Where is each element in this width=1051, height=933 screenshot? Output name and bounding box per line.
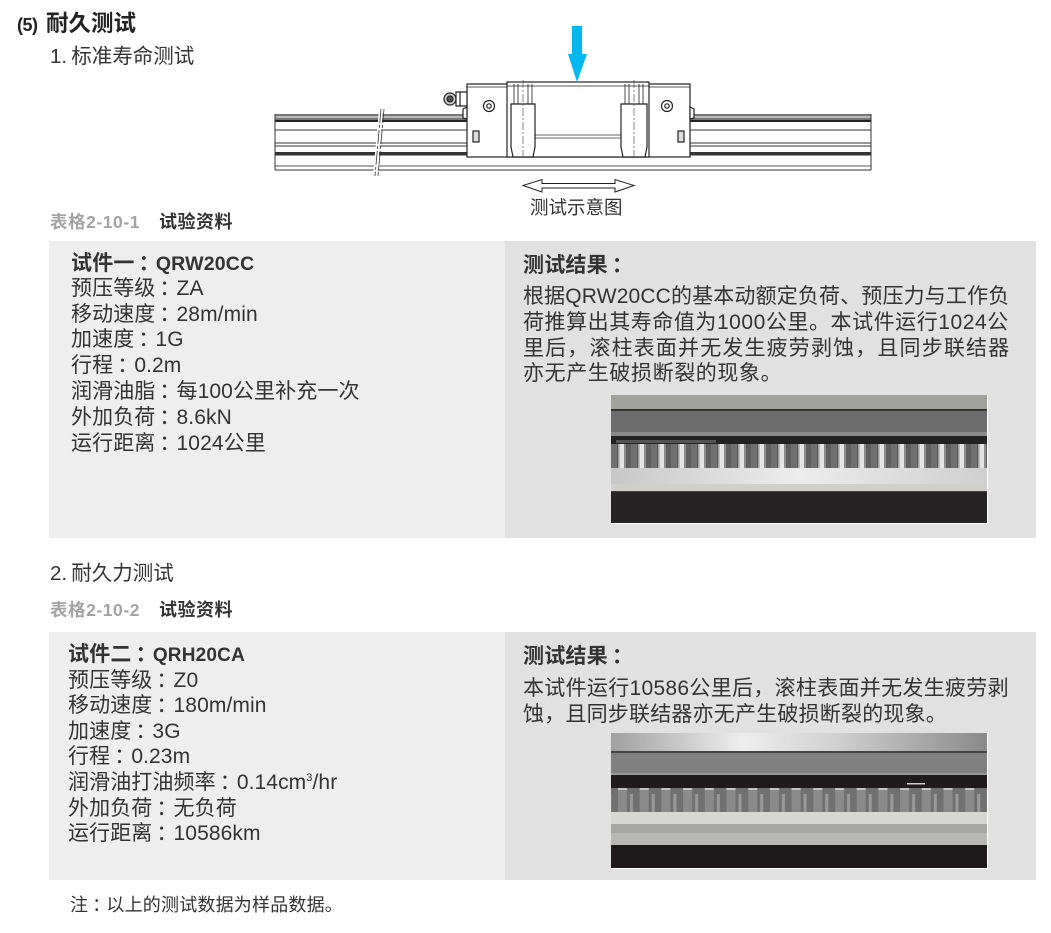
result one text: 里后，滚柱表面并无发生疲劳剥蚀，且同步联结器	[523, 337, 1010, 360]
specimen one title: 试件一：QRW20CC	[71, 247, 254, 277]
specimen two parameters: 外加负荷：无负荷	[68, 792, 237, 822]
specimen two parameters: 运行距离：10586km	[68, 817, 261, 847]
grease nipple	[444, 92, 467, 106]
rail	[275, 114, 871, 170]
specimen two parameters: 行程：0.23m	[68, 740, 190, 770]
table caption 2-10-2: 表格2-10-2	[50, 600, 140, 620]
text: 试验资料	[159, 600, 233, 620]
panel: test specimen one	[49, 241, 505, 538]
photo: roller surface after test two	[611, 733, 988, 869]
diagram: linear guide test setup	[274, 26, 872, 193]
specimen two parameters: 润滑油打油频率：0.14cm3/hr	[68, 766, 337, 796]
result one text: 荷推算出其寿命值为1000公里。本试件运行1024公	[523, 311, 1009, 334]
specimen one parameters: 行程：0.2m	[71, 349, 181, 379]
specimen two parameters	[68, 664, 337, 847]
result two text: 本试件运行10586公里后，滚柱表面并无发生疲劳剥	[523, 677, 1009, 700]
result one text	[523, 285, 1010, 385]
section heading: 耐久测试	[46, 11, 136, 36]
carriage block	[463, 80, 694, 157]
specimen one parameters: 外加负荷：8.6kN	[71, 401, 232, 431]
subheading: durability test: 2. 耐久力测试	[50, 562, 174, 585]
result one heading: 测试结果：	[523, 249, 633, 279]
photo: roller surface after test one	[611, 395, 988, 524]
specimen two parameters: 加速度：3G	[68, 715, 181, 745]
screws	[484, 100, 494, 112]
end seals	[473, 131, 479, 142]
specimen two title: 试件二：QRH20CA	[68, 638, 245, 668]
bolts	[511, 104, 535, 157]
table caption 2-10-1: 表格2-10-1	[50, 212, 140, 232]
blue load arrow	[568, 26, 587, 82]
result two text	[523, 677, 1009, 726]
section heading: (5)	[17, 15, 38, 35]
result one text: 亦无产生破损断裂的现象。	[523, 362, 782, 385]
result one text: 根据QRW20CC的基本动额定负荷、预压力与工作负	[523, 285, 1009, 308]
double-headed motion arrow	[523, 180, 634, 192]
result two text: 蚀，且同步联结器亦无产生破损断裂的现象。	[523, 703, 947, 726]
specimen one parameters: 移动速度：28m/min	[71, 298, 258, 328]
result two heading: 测试结果：	[523, 640, 633, 670]
specimen two parameters: 预压等级：Z0	[68, 664, 198, 694]
panel: test specimen two	[49, 632, 505, 880]
diagram caption: 测试示意图	[530, 197, 623, 218]
text: 试验资料	[159, 212, 233, 232]
subheading: standard life test: 1. 标准寿命测试	[50, 45, 194, 68]
table caption 2-10-1	[50, 212, 233, 232]
footnote: 注：以上的测试数据为样品数据。	[70, 891, 343, 917]
rail break mark	[375, 109, 384, 176]
specimen one parameters: 润滑油脂：每100公里补充一次	[71, 375, 360, 405]
specimen one parameters: 预压等级：ZA	[71, 272, 204, 302]
specimen one parameters	[71, 272, 360, 457]
specimen two parameters: 移动速度：180m/min	[68, 689, 267, 719]
table caption 2-10-2	[50, 600, 233, 620]
specimen one parameters: 加速度：1G	[71, 323, 184, 353]
specimen one parameters: 运行距离：1024公里	[71, 427, 266, 457]
panel: test result two	[505, 632, 1036, 880]
panel: test result one	[505, 241, 1036, 538]
